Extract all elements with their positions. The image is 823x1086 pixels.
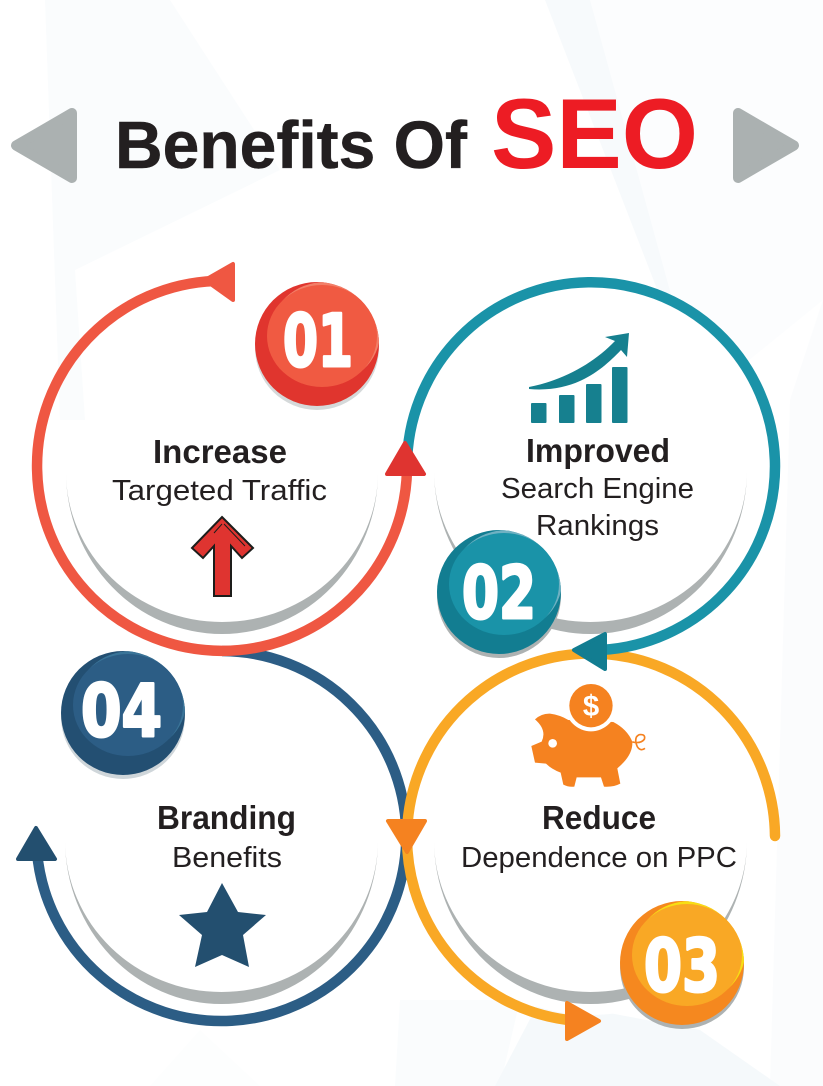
icon: star (179, 883, 266, 967)
arrowhead down (388, 821, 425, 852)
white disc (413, 288, 769, 644)
panel: 01 increase targeted traffic (37, 264, 424, 651)
badge 04: 04 (81, 669, 162, 753)
arrowhead top (205, 264, 233, 300)
panel: 04 branding benefits (18, 651, 406, 1021)
ring arrow (37, 281, 407, 651)
badge 03: 03 (644, 924, 720, 1008)
arrowhead right (387, 443, 424, 474)
subheading: Targeted Traffic (112, 475, 327, 507)
badge 03 (620, 901, 745, 1029)
arrowhead right (567, 1003, 599, 1039)
ring arrow (407, 282, 775, 650)
icon: piggy bank (531, 680, 645, 787)
gray crescent (66, 472, 378, 634)
arrowhead (18, 828, 55, 859)
heading: Increase (153, 433, 287, 470)
heading: Improved (526, 432, 670, 469)
icon: piggy bank: $ (583, 690, 599, 723)
title: SEO (491, 78, 698, 189)
ring arrow (407, 653, 775, 1020)
arrowhead (574, 634, 605, 669)
left title arrow (16, 113, 72, 178)
badge 01 (255, 282, 380, 410)
badge 04 (61, 651, 186, 779)
panel: 03 reduce dependence on PPC (388, 653, 775, 1039)
subheading: Dependence on PPC (461, 842, 737, 874)
white disc (413, 659, 769, 1015)
ring arrow (37, 651, 406, 1021)
right title arrow (738, 113, 794, 178)
gray crescent (434, 840, 747, 1004)
panel: 02 improved search engine rankings (407, 282, 775, 669)
icon: growth chart (529, 333, 629, 423)
subheading line 2: Rankings (536, 510, 659, 542)
subheading line 1: Search Engine (501, 473, 694, 505)
icon: up arrow (192, 517, 253, 596)
heading: Branding (157, 799, 296, 836)
badge 02: 02 (462, 551, 536, 635)
gray crescent (434, 470, 747, 634)
white disc (44, 658, 400, 1014)
title: Benefits Of (115, 108, 468, 183)
gray crescent (65, 840, 378, 1004)
badge 01: 01 (283, 299, 353, 383)
heading: Reduce (542, 799, 656, 836)
badge 02 (437, 530, 562, 658)
subheading: Benefits (172, 842, 282, 874)
title (115, 78, 698, 189)
